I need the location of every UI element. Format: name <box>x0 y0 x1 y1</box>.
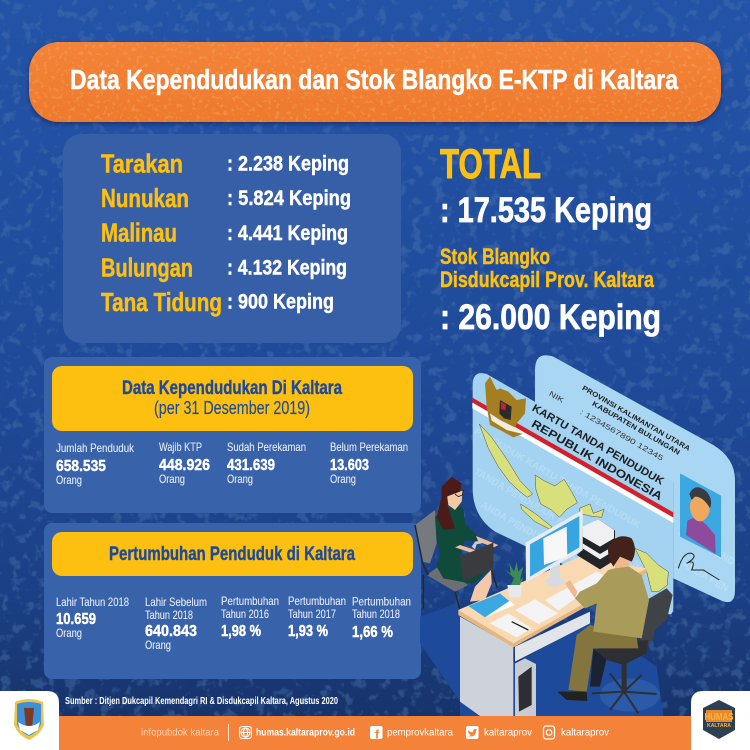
card watermark <box>472 426 736 620</box>
row: Bulungan: : 4.132 Keping <box>227 256 347 280</box>
panel: stok per kabupaten <box>63 134 401 343</box>
heading: pertumbuhan penduduk <box>52 532 413 576</box>
card: back: KABUPATEN BULUNGAN <box>591 401 681 457</box>
stat: lahir sebelum 2018: Tahun 2018 <box>145 608 193 622</box>
stat: sudah perekaman: Orang <box>227 472 253 486</box>
card: back <box>535 355 735 602</box>
label: infopubdok: infopubdok kaltara <box>141 726 219 738</box>
stat: pertumbuhan 2017: Tahun 2017 <box>288 607 336 621</box>
stat: pertumbuhan 2017 <box>288 594 346 640</box>
row: Tana Tidung: Tana Tidung <box>101 287 222 317</box>
papers and folder on desk <box>468 593 558 637</box>
stat: pertumbuhan 2017: 1,93 % <box>288 623 328 640</box>
icon: twitter <box>466 726 478 739</box>
printer <box>577 519 615 569</box>
stat: lahir sebelum 2018: Orang <box>145 638 171 652</box>
title banner <box>29 42 721 122</box>
neck <box>615 555 630 568</box>
row: Bulungan: Bulungan <box>101 252 193 282</box>
card watermark: PENDUDUK KARTU TANDA PENDUDUK <box>472 426 643 531</box>
card: back: PROVINSI KALIMANTAN UTARA <box>581 385 691 453</box>
briefcase <box>460 540 493 582</box>
stok blangko disdukcapil: Stok Blangko <box>440 244 550 269</box>
hands <box>455 536 498 553</box>
text: republik indonesia: REPUBLIK INDONESIA <box>529 418 664 503</box>
stok blangko disdukcapil: : 26.000 Keping <box>440 298 661 337</box>
stat: sudah perekaman: Sudah Perekaman <box>227 440 306 454</box>
card watermark: TANDA PEN <box>675 556 730 594</box>
card: front <box>472 373 736 620</box>
heading: data kependudukan: (per 31 Desember 2019) <box>154 398 310 418</box>
link: twitter: kaltaraprov <box>484 726 533 738</box>
source note: Sumber : Ditjen Dukcapil Kemendagri RI & Disdukcapil Kaltara, Agustus 2020 <box>65 696 338 707</box>
panel: pertumbuhan penduduk <box>44 523 421 679</box>
logo: Humas Kaltara: KALTARA <box>707 723 731 729</box>
chair <box>592 588 673 713</box>
stat: belum perekaman: Orang <box>330 472 356 486</box>
stat: sudah perekaman: 431.639 <box>227 457 275 474</box>
stat: lahir sebelum 2018: Lahir Sebelum <box>145 595 207 609</box>
row: Tarakan: Tarakan <box>101 148 183 178</box>
chair base shadow <box>600 678 660 712</box>
stat: sudah perekaman <box>227 440 306 486</box>
footer bar <box>59 716 691 750</box>
icon: facebook <box>370 726 382 742</box>
stat: jumlah penduduk <box>56 441 135 487</box>
signature <box>678 553 719 580</box>
icon: facebook: f <box>375 728 380 742</box>
white tab: left logo <box>0 691 59 750</box>
stat: lahir tahun 2018: Orang <box>56 626 82 640</box>
leg <box>470 570 492 602</box>
row: Tana Tidung: : 900 Keping <box>227 290 334 314</box>
stat: lahir tahun 2018 <box>56 595 129 640</box>
icon: instagram <box>544 726 554 739</box>
face <box>447 490 463 510</box>
link: facebook: pemprovkaltara <box>387 726 453 738</box>
icon: globe <box>240 726 252 738</box>
heading: pertumbuhan penduduk: Pertumbuhan Penduduk di Kaltara <box>109 544 355 565</box>
row: Nunukan <box>101 183 351 213</box>
stat: pertumbuhan 2018: 1,66 % <box>352 624 393 641</box>
far leg <box>590 648 607 687</box>
row: Tarakan <box>101 148 349 178</box>
logo: Humas Kaltara: HUMAS <box>704 712 734 723</box>
heading: data kependudukan <box>52 366 413 431</box>
row: Malinau: : 4.441 Keping <box>227 222 348 245</box>
white tab: right logo <box>691 691 750 750</box>
row: Tarakan: : 2.238 Keping <box>227 152 349 176</box>
office worker <box>557 536 673 713</box>
footer social links <box>141 724 610 742</box>
hair <box>608 536 635 567</box>
chair <box>415 510 497 610</box>
total stok <box>440 140 652 230</box>
row: Nunukan: Nunukan <box>101 183 189 213</box>
hand <box>565 580 577 598</box>
stat: lahir tahun 2018: 10.659 <box>56 611 96 628</box>
heading: data kependudukan: Data Kependudukan Di Kaltara <box>122 378 342 399</box>
stat: belum perekaman <box>330 440 408 486</box>
stat: pertumbuhan 2016: 1,98 % <box>221 623 261 640</box>
total stok: TOTAL <box>440 140 541 187</box>
illustration: e-KTP card and service desk <box>415 355 736 716</box>
logo: Humas Kaltara <box>703 700 735 739</box>
stat: lahir tahun 2018: Lahir Tahun 2018 <box>56 595 129 609</box>
floor <box>420 603 663 716</box>
row: Malinau <box>101 218 348 248</box>
stat: belum perekaman: Belum Perekaman <box>330 440 408 454</box>
stat: pertumbuhan 2017: Pertumbuhan <box>288 594 346 608</box>
stat: jumlah penduduk: Orang <box>56 473 82 487</box>
row: Malinau: Malinau <box>101 218 177 248</box>
map of Indonesia <box>479 424 668 592</box>
stat: wajib ktp: Wajib KTP <box>159 440 202 454</box>
stat: lahir sebelum 2018 <box>145 595 207 652</box>
stat: pertumbuhan 2016: Pertumbuhan <box>221 594 279 608</box>
row: Nunukan: : 5.824 Keping <box>227 187 351 210</box>
stat: jumlah penduduk: Jumlah Penduduk <box>56 441 135 455</box>
card watermark: TANDA PEND <box>675 526 736 568</box>
row: Bulungan <box>101 252 347 282</box>
card: back: NIK <box>547 389 566 405</box>
desk <box>458 557 647 716</box>
stat: jumlah penduduk: 658.535 <box>56 458 106 475</box>
text: kartu tanda penduduk: KARTU TANDA PENDUDUK <box>530 402 666 488</box>
glasses <box>448 490 463 497</box>
stok blangko disdukcapil <box>440 244 661 337</box>
keyboard <box>545 572 607 611</box>
panel: data kependudukan <box>44 357 421 513</box>
row: Tana Tidung <box>101 287 334 317</box>
stat: pertumbuhan 2016 <box>221 594 279 640</box>
trousers <box>568 625 638 692</box>
dress <box>435 505 490 584</box>
computer monitor <box>526 510 583 588</box>
link: instagram: kaltaraprov <box>561 726 610 738</box>
card watermark: ANDA PENDUDUK KARTU TANDA PENDUDUK <box>478 500 677 620</box>
stat: pertumbuhan 2018 <box>352 594 411 641</box>
stat: pertumbuhan 2018: Pertumbuhan <box>352 594 411 608</box>
torso and arm <box>575 565 649 638</box>
logo: Kaltara province shield <box>14 699 44 740</box>
card watermark: TANDA PENDUDUK KARTU TANDA PEND <box>472 466 649 575</box>
card photo <box>680 473 721 557</box>
red and white stripe <box>472 398 673 523</box>
icon: garuda <box>485 377 526 437</box>
stok blangko disdukcapil: Disdukcapil Prov. Kaltara <box>440 267 655 292</box>
stat: pertumbuhan 2016: Tahun 2016 <box>221 607 269 621</box>
stat: wajib ktp <box>159 440 210 486</box>
stat: pertumbuhan 2018: Tahun 2018 <box>352 607 400 621</box>
woman applicant <box>415 477 498 610</box>
stat: wajib ktp: Orang <box>159 472 185 486</box>
card: back: : 1234567890 12345 <box>578 407 665 463</box>
stat: wajib ktp: 448.926 <box>159 457 210 474</box>
shoe <box>557 692 587 701</box>
stat: lahir sebelum 2018: 640.843 <box>145 623 197 640</box>
hair <box>437 477 462 530</box>
stat: belum perekaman: 13.603 <box>330 457 369 474</box>
link: website: humas.kaltaraprov.go.id <box>256 726 355 738</box>
total stok: : 17.535 Keping <box>440 191 652 230</box>
plant <box>505 562 523 597</box>
